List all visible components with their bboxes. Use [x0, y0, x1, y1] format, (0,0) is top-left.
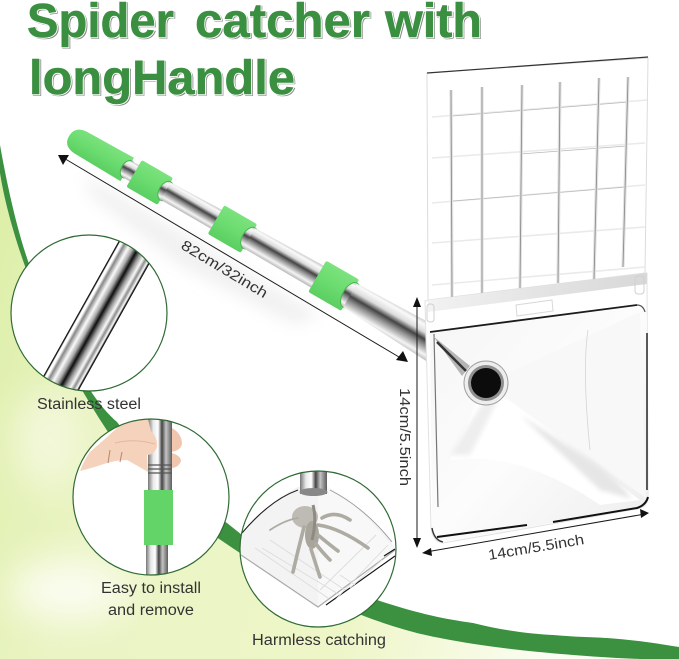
- label: easy to install: [101, 580, 201, 619]
- hand: [80, 419, 157, 472]
- label: width: 14cm/5.5inch: [487, 532, 585, 564]
- sleeve 2: [126, 160, 179, 208]
- circle: install detail: [73, 415, 229, 577]
- sleeve 4: [308, 261, 366, 315]
- spider: [270, 505, 368, 577]
- green sleeve: [144, 490, 173, 545]
- dimension arrow: length: [58, 155, 408, 362]
- tube opening: [464, 361, 508, 405]
- title: longHandle: [29, 52, 295, 105]
- grid plate: [241, 550, 395, 607]
- title: longHandle: [30, 53, 296, 106]
- title: longHandle: [29, 52, 295, 105]
- circle: stainless steel detail: [11, 229, 167, 405]
- label: stainless steel: Stainless steel: [37, 396, 141, 413]
- dimension arrow: width: [422, 509, 649, 556]
- rod segment 3: [243, 226, 327, 290]
- rod segment 1: [123, 161, 143, 183]
- dimension arrow: height: [413, 297, 421, 548]
- outer frame: [425, 273, 648, 543]
- sleeve 3: [208, 205, 263, 256]
- background: pale green region: [0, 174, 630, 659]
- title: [27, 0, 483, 106]
- rod shadow: [85, 175, 320, 325]
- dome: [241, 487, 395, 607]
- telescopic handle: [60, 118, 463, 373]
- label: easy to install: and remove: [108, 602, 194, 619]
- label: harmless catching: Harmless catching: [252, 632, 386, 649]
- upper rod: [148, 415, 172, 490]
- label: 82cm/32inch: 82cm/32inch: [178, 238, 270, 302]
- background: green curved band: [0, 145, 679, 659]
- label: easy to install: Easy to install: [101, 580, 201, 597]
- lower rod: [146, 545, 168, 577]
- catcher lid with grid: [427, 57, 648, 300]
- label: height: 14cm/5.5inch: [396, 388, 412, 486]
- circle: harmless catching detail: [240, 470, 396, 627]
- top tube: [300, 470, 327, 494]
- rod segment 2: [161, 181, 225, 231]
- back fingers: [172, 428, 182, 452]
- rod segment 4: [340, 281, 463, 373]
- catcher base funnel: [425, 273, 648, 543]
- sleeve 1: end cap: [62, 124, 139, 184]
- inner rod: [433, 336, 470, 376]
